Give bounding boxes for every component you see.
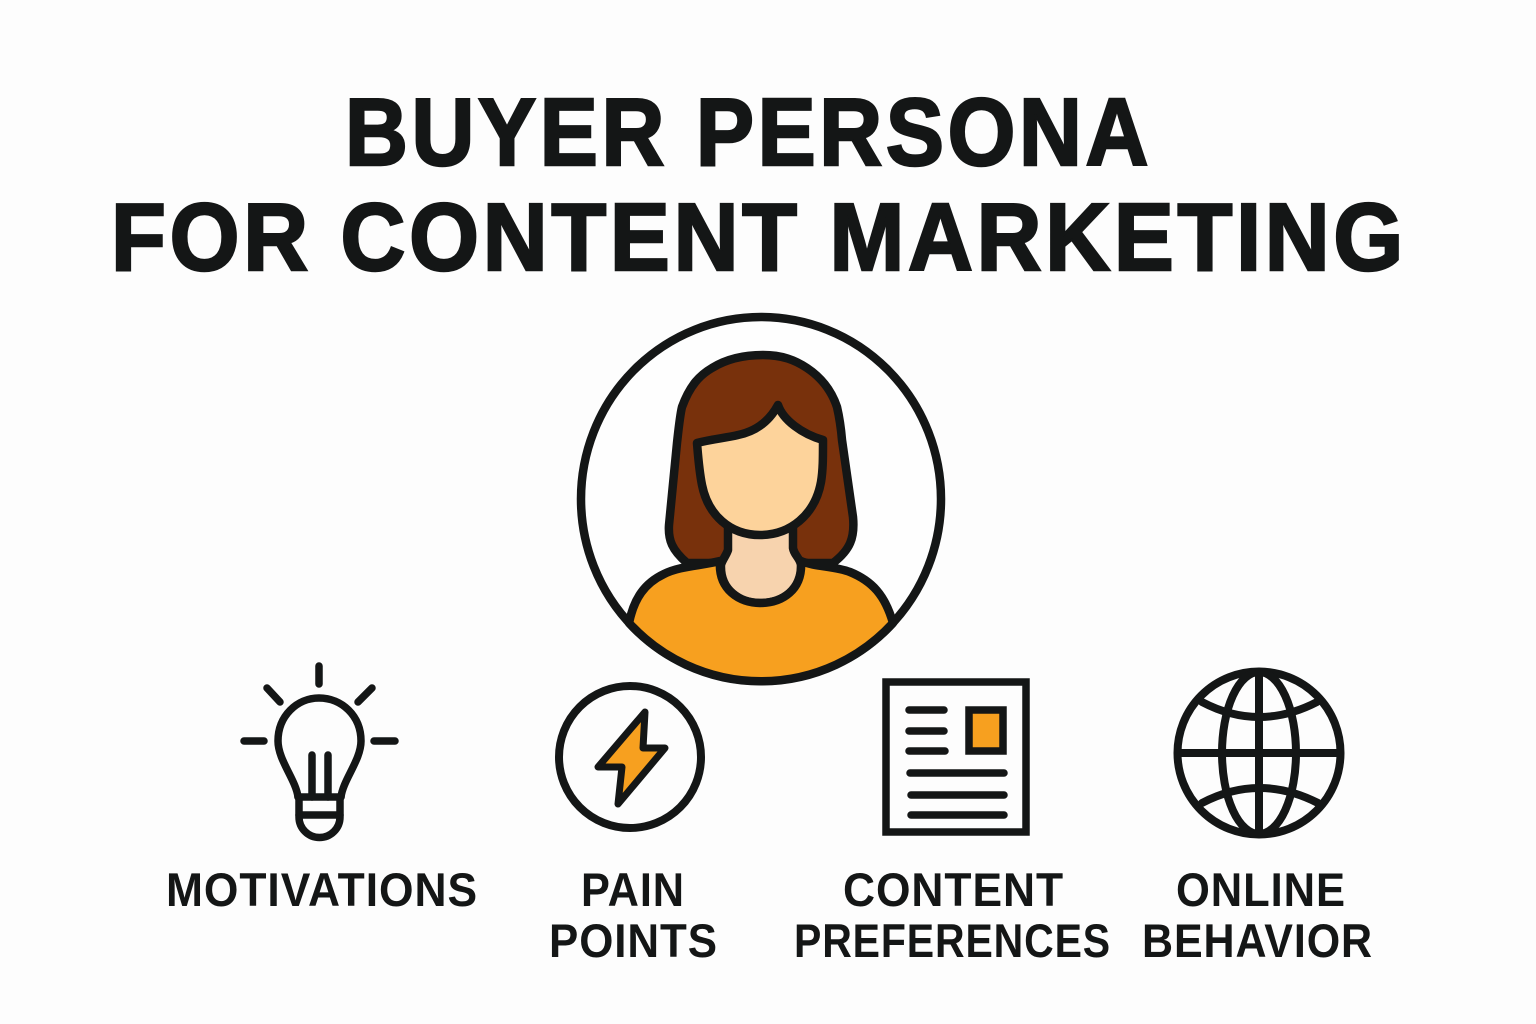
icon: content document	[886, 682, 1026, 832]
label: online behavior	[1142, 863, 1373, 967]
icon: lightning bolt in circle	[559, 686, 701, 828]
label: pain points: POINTS	[549, 914, 718, 967]
title: BUYER PERSONA	[345, 79, 1152, 186]
title	[111, 79, 1407, 291]
persona avatar	[581, 317, 941, 681]
label: content preferences: PREFERENCES	[794, 914, 1111, 967]
label: pain points	[549, 863, 718, 967]
label: pain points: PAIN	[581, 863, 685, 916]
avatar circle	[581, 317, 941, 681]
label: online behavior: ONLINE	[1176, 863, 1346, 916]
neck	[721, 525, 801, 603]
label: motivations: MOTIVATIONS	[166, 863, 478, 916]
title: FOR CONTENT MARKETING	[111, 184, 1407, 291]
label: content preferences	[794, 863, 1111, 967]
icon: light bulb	[244, 666, 395, 837]
label: content preferences: CONTENT	[843, 863, 1064, 916]
shirt	[629, 561, 893, 681]
label: online behavior: BEHAVIOR	[1142, 914, 1373, 967]
face	[697, 405, 823, 535]
icon: globe	[1178, 672, 1340, 834]
hair	[669, 355, 853, 563]
